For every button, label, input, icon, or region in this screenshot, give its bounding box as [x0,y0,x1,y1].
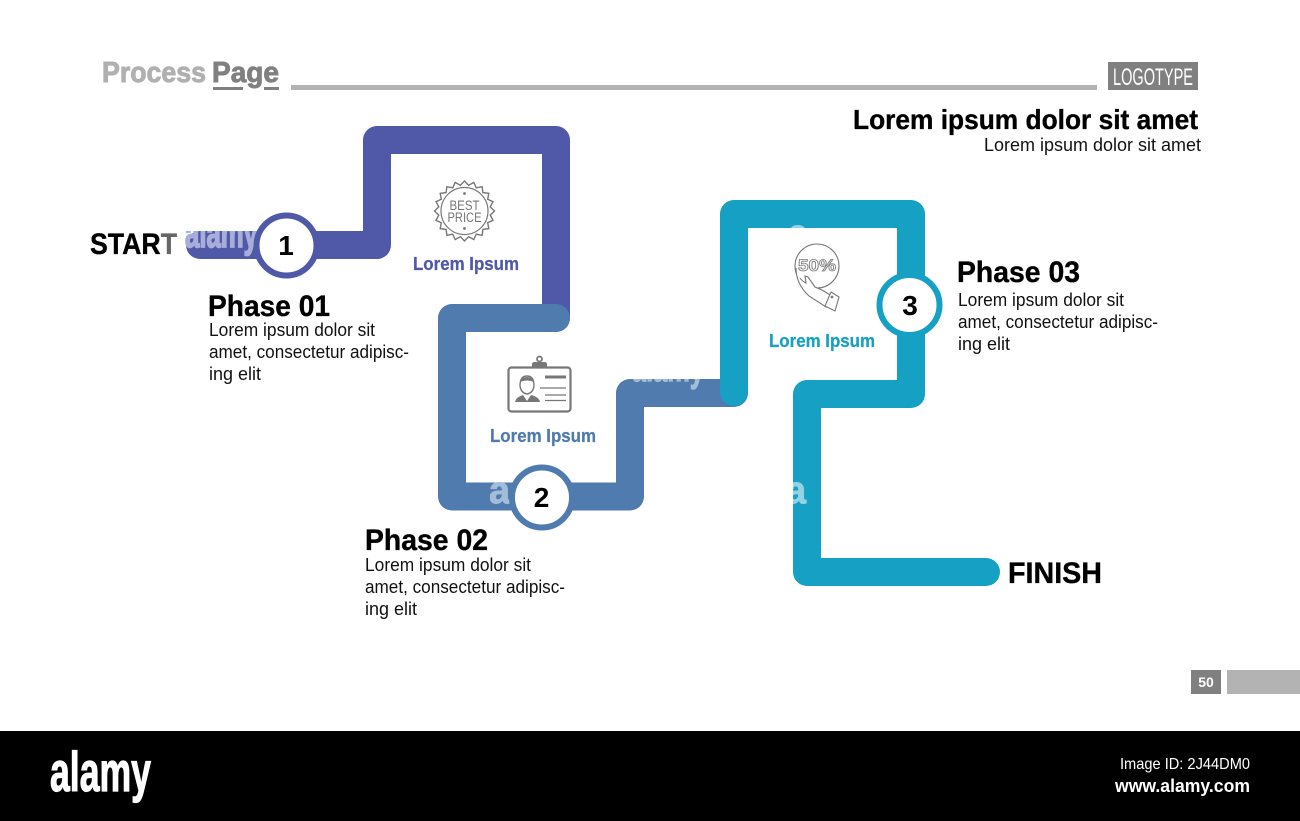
phase 02 text [365,524,565,619]
icon: best price badge [434,181,494,241]
marker 2: 2 [534,482,549,513]
footer logo: alamy [50,740,151,803]
start label: START [90,228,177,261]
phase 03 text: ing elit [958,333,1010,354]
phase 01 text: Lorem ipsum dolor sit [209,319,375,340]
watermark fragments [185,212,809,512]
title: Process Page: Process [102,57,206,89]
icon: 50 percent hand: 50% [798,256,836,275]
icon: id badge [508,356,570,412]
marker 2 [512,468,572,528]
marker 3 [880,275,940,335]
footer url: www.alamy.com [1114,776,1250,796]
phase 01 text: Phase 01 [208,290,330,323]
watermark fragments: a [489,470,511,512]
footer image id: Image ID: 2J44DM0 [1120,756,1250,773]
phase 02 text: ing elit [365,598,417,619]
phase 01 text [208,290,409,384]
phase 03 text: Lorem ipsum dolor sit [958,289,1124,310]
path segment: phase 1 purple [200,140,556,318]
subtitle block: Lorem ipsum dolor sit amet [853,104,1198,135]
marker 1 [256,216,316,276]
subtitle block: Lorem ipsum dolor sit amet [984,134,1201,155]
header rule [291,85,1097,90]
watermark fragments: a [786,470,807,512]
phase 03 text: Phase 03 [957,256,1080,289]
icon: 50 percent hand [795,244,839,311]
phase 01 text: ing elit [209,363,261,384]
title: Process Page: Page [212,57,279,89]
page bar [1227,670,1300,694]
label: lorem ipsum teal: Lorem Ipsum [769,331,875,351]
phase 02 text: Lorem ipsum dolor sit [365,554,531,575]
path segment: phase 2 blue [452,318,734,496]
watermark fragments: a [788,213,809,255]
marker 3: 3 [902,290,918,321]
footer band [0,731,1300,821]
logotype: LOGOTYPE [1113,64,1193,91]
logotype [1108,62,1198,91]
label: lorem ipsum blue: Lorem Ipsum [490,426,596,446]
phase 03 text [957,256,1158,354]
phase 03 text: amet, consectetur adipisc- [958,311,1158,332]
phase 01 text: amet, consectetur adipisc- [209,341,409,362]
phase 02 text: amet, consectetur adipisc- [365,576,565,597]
icon: best price badge: PRICE [448,210,482,225]
label: lorem ipsum purple: Lorem Ipsum [413,254,519,274]
page number: 50 [1198,674,1214,690]
marker 1: 1 [278,230,294,261]
title: Process Page [102,57,279,90]
watermark fragments: alamy [632,348,704,390]
phase 02 text: Phase 02 [365,524,488,557]
path segment: phase 3 teal [734,214,986,572]
subtitle block [853,104,1201,155]
page number [1191,670,1221,694]
watermark fragments: alamy [185,212,258,256]
icon: best price badge: BEST [450,198,480,213]
finish label: FINISH [1008,557,1102,590]
